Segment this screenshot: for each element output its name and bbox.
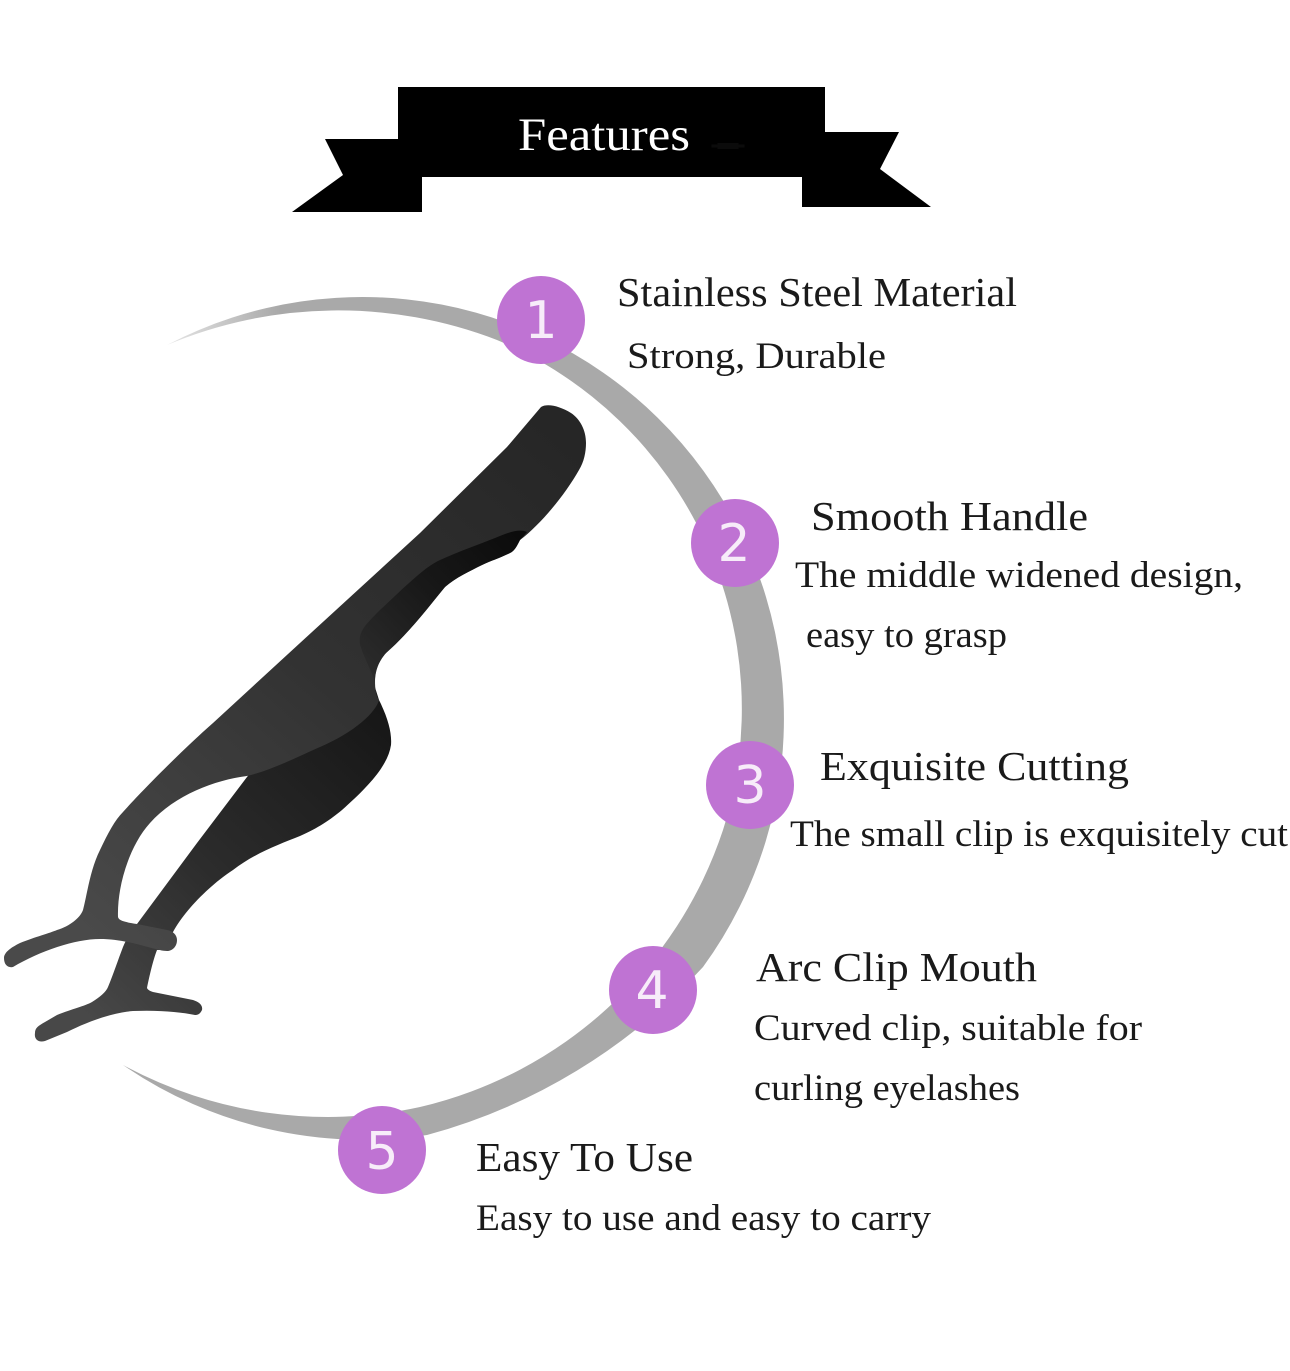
- feature 2 text: easy to grasp: [806, 615, 1007, 656]
- tweezers icon: [4, 405, 586, 1042]
- feature 3 text: The small clip is exquisitely cut: [790, 814, 1289, 855]
- step 3 marker: 3: [733, 756, 767, 816]
- feature 5 text: Easy To Use: [476, 1134, 693, 1180]
- feature 2 text: Smooth Handle: [811, 493, 1088, 539]
- step 1 marker: [497, 276, 585, 364]
- banner: [292, 87, 931, 212]
- feature 4 text: Arc Clip Mouth: [756, 944, 1037, 990]
- feature 3 text: Exquisite Cutting: [820, 743, 1129, 789]
- feature 5 text: Easy to use and easy to carry: [476, 1198, 932, 1239]
- feature 4 text: [754, 944, 1142, 1109]
- lower jaw: [35, 640, 391, 1042]
- upper arm and handle: [4, 405, 586, 967]
- feature 2 text: The middle widened design,: [795, 555, 1243, 596]
- feature 3 text: [790, 743, 1289, 855]
- step 4 marker: [609, 946, 697, 1034]
- step 5 marker: [338, 1106, 426, 1194]
- step 5 marker: 5: [365, 1122, 399, 1182]
- feature 1 text: Strong, Durable: [627, 336, 886, 377]
- feature 1 text: Stainless Steel Material: [617, 269, 1017, 315]
- step 4 marker: 4: [635, 961, 669, 1021]
- arc: [123, 292, 784, 1140]
- step 2 marker: 2: [717, 514, 751, 574]
- feature 1 text: [617, 269, 1017, 377]
- feature 5 text: [476, 1134, 932, 1239]
- feature 4 text: Curved clip, suitable for: [754, 1008, 1142, 1049]
- step 1 marker: 1: [524, 291, 558, 351]
- title: Features: [518, 109, 690, 161]
- step 2 marker: [691, 499, 779, 587]
- step 3 marker: [706, 741, 794, 829]
- feature 2 text: [795, 493, 1243, 656]
- handle ridge band: [360, 531, 527, 682]
- feature 4 text: curling eyelashes: [754, 1068, 1020, 1109]
